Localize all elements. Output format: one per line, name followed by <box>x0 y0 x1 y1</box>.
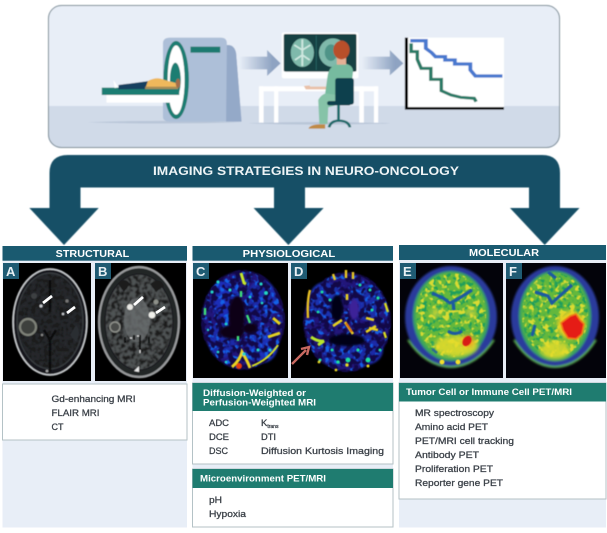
text block: tumor cell or immune cell PET/MRI: MR spectroscopy <box>415 408 494 419</box>
text block: diffusion or perfusion weighted MRI: DCE <box>209 432 229 443</box>
text block: tumor cell or immune cell PET/MRI: Tumor Cell or Immune Cell PET/MRI <box>406 387 572 398</box>
perfusion mottling <box>304 273 390 371</box>
text block: microenvironment PET/MRI: pH <box>209 495 222 506</box>
PET yellow mottling <box>522 273 588 357</box>
heading: physiological <box>192 246 393 261</box>
label F: F <box>509 264 517 279</box>
illustration group <box>87 32 504 129</box>
arrow: red marker <box>292 347 309 364</box>
column background <box>192 246 393 528</box>
panel outline <box>48 6 560 148</box>
label E: E <box>403 264 412 279</box>
text block: diffusion or perfusion weighted MRI <box>192 383 393 464</box>
heading: molecular <box>399 245 606 260</box>
panel: physiological <box>192 246 393 528</box>
text block: tumor cell or immune cell PET/MRI: Reporter gene PET <box>415 478 503 489</box>
text block: diffusion or perfusion weighted MRI: DSC <box>209 446 228 457</box>
text block: tumor cell or immune cell PET/MRI: Antibody PET <box>415 450 479 461</box>
icon: patient on table <box>102 78 180 103</box>
PET green mottling <box>416 273 486 357</box>
arrow: three-way imaging strategies banner <box>29 155 579 245</box>
column background <box>2 246 187 528</box>
label B: B <box>98 264 107 279</box>
text block: structural modalities: CT <box>52 422 64 433</box>
arrow: scanner to monitor <box>239 50 281 76</box>
label B <box>95 263 111 279</box>
label D: D <box>294 264 303 279</box>
label A: A <box>6 264 16 279</box>
text block: structural modalities: FLAIR MRI <box>52 408 100 419</box>
text block: tumor cell or immune cell PET/MRI: Amino acid PET <box>415 422 488 433</box>
panel: molecular <box>399 245 606 528</box>
label A <box>3 263 19 279</box>
image B: contrast MRI with lesions <box>95 263 186 381</box>
icon: monitor with brain scans <box>282 32 358 78</box>
heading: structural: STRUCTURAL <box>56 248 130 260</box>
perfusion mottling <box>202 271 284 369</box>
icon: MRI scanner <box>163 38 242 122</box>
text block: diffusion or perfusion weighted MRI: Diffusion-Weighted or <box>203 388 306 399</box>
dark mottling <box>201 270 285 370</box>
text block: diffusion or perfusion weighted MRI: trans <box>267 424 279 430</box>
image F: PET scan <box>506 263 606 378</box>
text block: microenvironment PET/MRI: Hypoxia <box>209 509 247 520</box>
arrow: monitor to chart <box>362 50 403 75</box>
heading: physiological: PHYSIOLOGICAL <box>243 248 336 260</box>
text block: tumor cell or immune cell PET/MRI: PET/MRI cell tracking <box>415 436 514 447</box>
chart: survival curves <box>405 38 504 108</box>
text block: microenvironment PET/MRI <box>192 469 393 527</box>
arrows: white markers <box>43 296 75 313</box>
text block: diffusion or perfusion weighted MRI: ADC <box>209 418 229 429</box>
heading: structural <box>2 246 187 261</box>
PET green mottling <box>522 273 588 357</box>
column background <box>399 246 606 528</box>
floor shadows <box>87 121 391 125</box>
panel background <box>48 5 560 148</box>
image A: contrast MRI <box>3 263 91 381</box>
text block: diffusion or perfusion weighted MRI: Perfusion-Weighted MRI <box>203 398 316 408</box>
text block: tumor cell or immune cell PET/MRI <box>399 383 606 499</box>
dark mottling <box>303 272 391 372</box>
label D <box>291 263 307 279</box>
image D: perfusion map <box>291 263 393 378</box>
label E <box>400 263 416 279</box>
text block: tumor cell or immune cell PET/MRI: Proliferation PET <box>415 464 493 475</box>
label F <box>506 263 522 279</box>
icon: technician on chair <box>304 41 354 129</box>
text block: structural modalities <box>2 384 187 440</box>
arrows: white markers <box>134 297 165 313</box>
text block: structural modalities: Gd-enhancing MRI <box>52 394 136 405</box>
image C: perfusion map <box>193 263 288 378</box>
heading: molecular: MOLECULAR <box>469 247 539 259</box>
text block: microenvironment PET/MRI: Microenvironment PET/MRI <box>200 474 326 484</box>
label C: C <box>196 264 206 279</box>
text block: diffusion or perfusion weighted MRI: K <box>261 418 267 429</box>
panel: structural <box>2 246 187 528</box>
title: IMAGING STRATEGIES IN NEURO-ONCOLOGY <box>153 166 459 178</box>
panel: imaging workflow illustration <box>48 5 560 148</box>
image E: PET scan <box>400 263 503 378</box>
icon: desk <box>259 86 378 123</box>
text block: diffusion or perfusion weighted MRI: Diffusion Kurtosis Imaging <box>261 446 384 457</box>
PET yellow mottling <box>416 273 486 357</box>
floor <box>48 106 560 148</box>
text block: diffusion or perfusion weighted MRI: DTI <box>261 432 276 443</box>
label C <box>193 263 209 279</box>
